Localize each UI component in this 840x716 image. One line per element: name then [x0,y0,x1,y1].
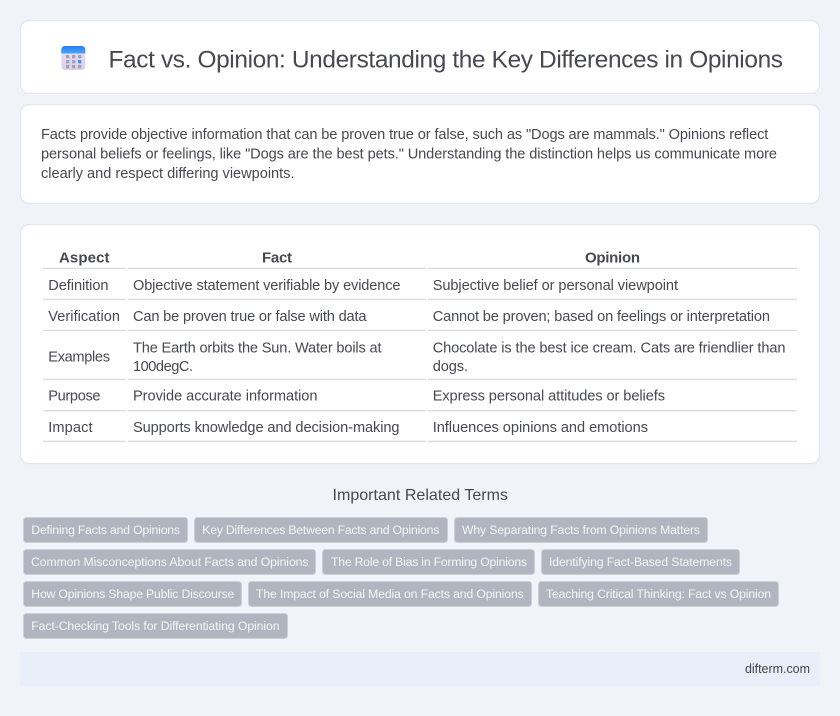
table header row: Aspect [59,250,110,267]
intro text: clearly and respect differing viewpoints. [41,166,294,182]
tag [248,582,532,606]
row: definition: Objective statement verifiable by evidence [133,278,400,294]
tag: Why Separating Facts from Opinions Matters [462,523,700,537]
table header row: Fact [262,250,292,267]
heading: related terms: Important Related Terms [332,487,508,504]
tag: Key Differences Between Facts and Opinions [202,523,439,537]
row: definition [43,278,797,300]
header panel [21,21,819,93]
tag [538,582,778,606]
tag: The Role of Bias in Forming Opinions [331,555,527,569]
table header row: Opinion [585,250,640,267]
row: examples: The Earth orbits the Sun. Water boils at [133,340,382,356]
tag: Fact-Checking Tools for Differentiating Opinion [31,619,279,633]
row: purpose [43,389,797,411]
intro text [41,127,777,182]
row: impact: Supports knowledge and decision-making [133,420,400,436]
row: verification: Verification [48,309,120,325]
row: impact [43,420,797,442]
row: examples: Examples [48,349,110,365]
tag [542,550,740,574]
tag [24,550,316,574]
row: verification: Can be proven true or false with data [133,309,367,325]
tag: Identifying Fact-Based Statements [549,555,732,569]
row: purpose: Purpose [48,389,100,405]
row: examples: dogs. [433,359,468,375]
tag: Common Misconceptions About Facts and Opinions [31,555,308,569]
row: definition: Definition [48,278,108,294]
panel: comparison table [21,225,819,464]
tag: The Impact of Social Media on Facts and Opinions [256,587,524,601]
footer site name: difterm.com [745,662,810,676]
tag: Defining Facts and Opinions [31,523,180,537]
intro text: personal beliefs or feelings, like "Dogs are the best pets." Understanding the distinction helps us communicate more [41,146,777,162]
row: verification [43,309,797,331]
tag: Teaching Critical Thinking: Fact vs Opinion [546,587,771,601]
row: impact: Influences opinions and emotions [433,420,648,436]
row: examples [43,340,797,380]
row: examples: Chocolate is the best ice cream. Cats are friendlier than [433,340,786,356]
tag [322,550,534,574]
title: Fact vs. Opinion: Understanding the Key Differences in Opinions [108,46,783,74]
row: definition: Subjective belief or personal viewpoint [433,278,678,294]
tag [24,582,242,606]
row: examples: 100degC. [133,359,193,375]
icon: calendar [61,46,85,70]
tag: How Opinions Shape Public Discourse [31,587,235,601]
tag [194,518,448,542]
table header row [43,250,797,269]
intro text: Facts provide objective information that can be proven true or false, such as "Dogs are mammals." Opinions reflect [41,127,768,143]
tag [24,614,288,638]
row: impact: Impact [48,420,92,436]
row: purpose: Provide accurate information [133,389,318,405]
tag [24,518,188,542]
row: purpose: Express personal attitudes or beliefs [433,389,665,405]
related term tags [24,518,778,638]
row: verification: Cannot be proven; based on feelings or interpretation [433,309,770,325]
footer [20,652,820,686]
tag [454,518,708,542]
panel: introduction [21,105,819,203]
